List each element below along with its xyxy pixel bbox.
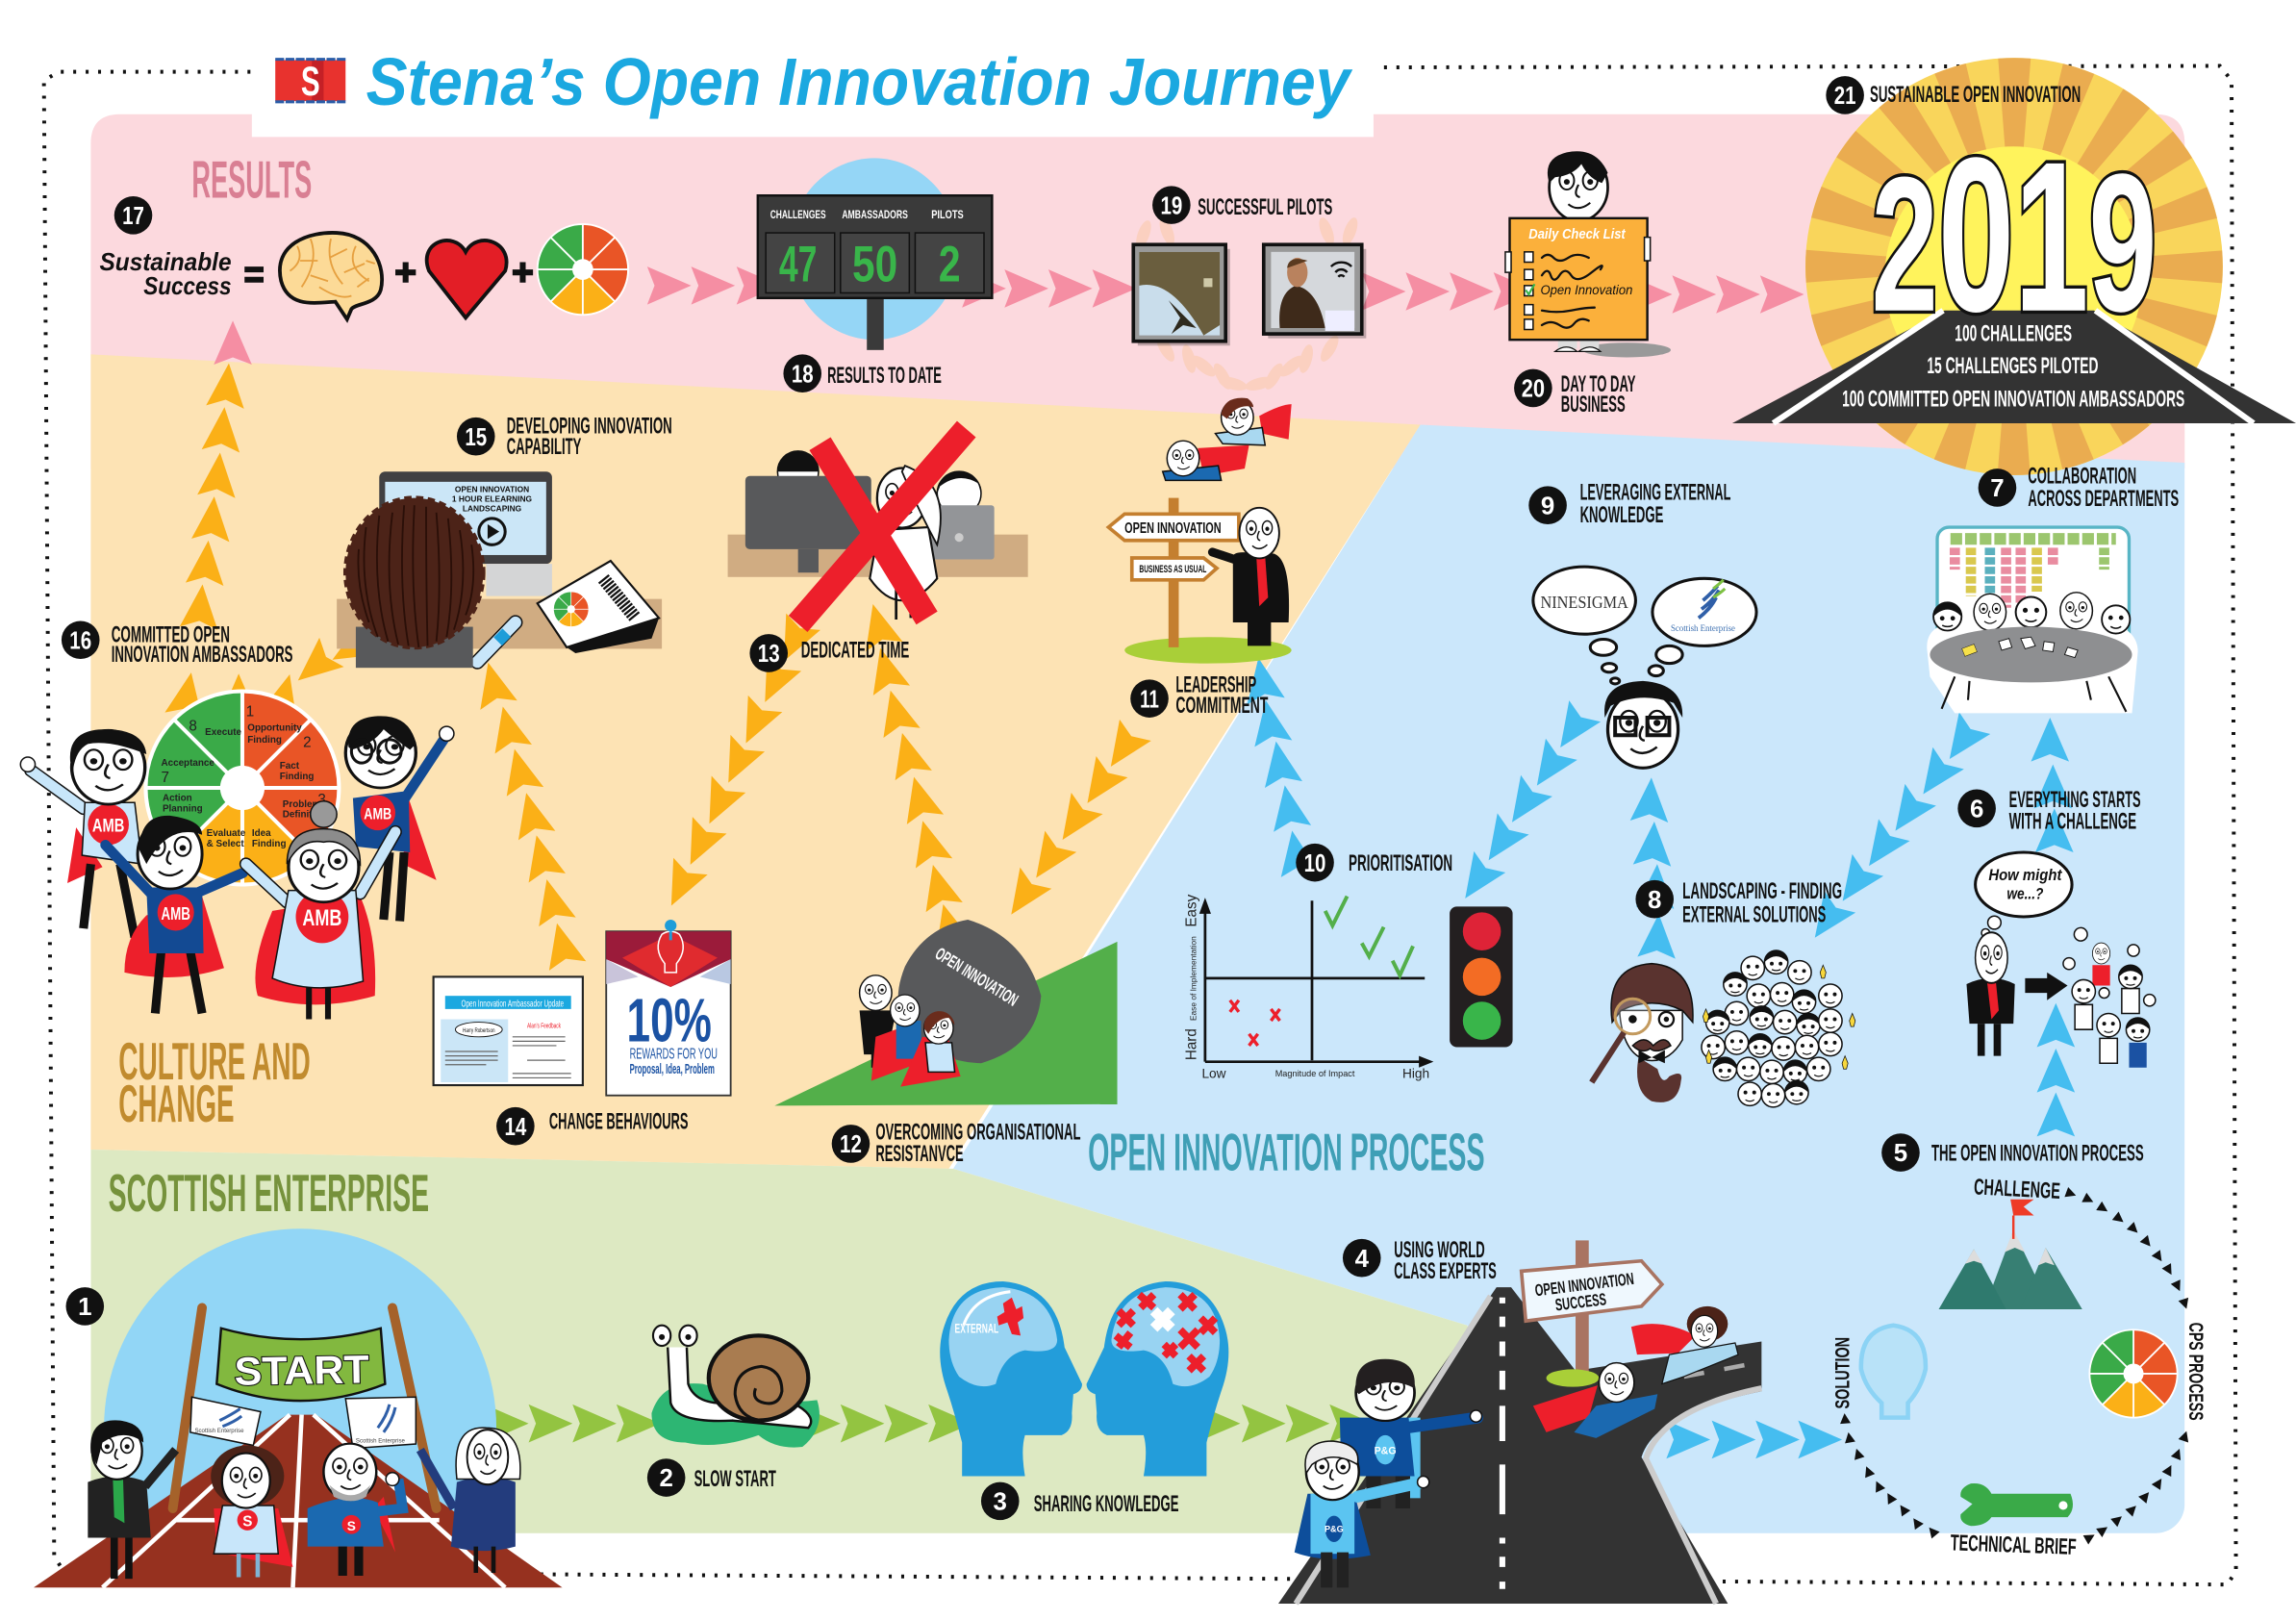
title background xyxy=(252,0,1374,137)
wheel labels: Action xyxy=(163,794,192,804)
sign: open innovation success: OPEN INNOVATION xyxy=(1534,1269,1635,1300)
wheel labels: Acceptance xyxy=(161,758,214,769)
person: suit and green tie xyxy=(88,1420,176,1579)
icon: stena flag xyxy=(275,59,345,105)
leadership commitment: signpost and man xyxy=(1108,498,1292,664)
step label 6: EVERYTHING STARTS xyxy=(2009,787,2141,812)
road under sun xyxy=(1732,311,2296,423)
heading: culture and change: CULTURE AND xyxy=(118,1031,311,1091)
heading: open innovation process: OPEN INNOVATION PROCESS xyxy=(1088,1122,1485,1181)
arrows: blue landscaping to knowledge xyxy=(1630,776,1678,959)
step badge 20 xyxy=(1514,369,1552,407)
screen text: LANDSCAPING xyxy=(463,503,521,513)
panel: open innovation process xyxy=(953,424,2184,1533)
panel: scottish enterprise xyxy=(90,1150,1552,1533)
heading: scottish enterprise: SCOTTISH ENTERPRISE xyxy=(109,1163,429,1223)
step label 8 xyxy=(1682,878,1842,926)
equation: sustainable success xyxy=(100,224,628,319)
sharing knowledge: left head: EXTERNAL xyxy=(955,1321,998,1335)
arrows: green scottish enterprise path xyxy=(485,1405,1374,1442)
screen text: 1 HOUR ELEARNING xyxy=(452,494,532,503)
woman with phone xyxy=(870,466,941,620)
wheel labels: Opportunity xyxy=(247,723,302,734)
ambassador: front left xyxy=(106,816,243,1013)
black arrow xyxy=(2025,973,2068,1000)
cycle label: cps process: CPS PROCESS xyxy=(2184,1323,2208,1421)
axis labels: High xyxy=(1402,1066,1429,1080)
equation: sustainable success: Success xyxy=(143,273,232,300)
collaboration across departments: whiteboard and team xyxy=(1927,527,2138,713)
arrows: orange up to results xyxy=(164,362,380,721)
results list xyxy=(1842,321,2184,411)
scoreboard: results to date xyxy=(758,158,992,350)
sticky notes xyxy=(1951,539,2116,608)
axis labels: Easy xyxy=(1184,894,1200,927)
step badge 10: 10 xyxy=(1304,850,1325,877)
road edge lines xyxy=(1774,311,2254,423)
cycle label: challenge: CHALLENGE xyxy=(1973,1174,2061,1203)
arrows: blue knowledge to prioritisation xyxy=(1450,700,1601,909)
step label 7 xyxy=(2028,463,2179,511)
icon: wheel in cycle xyxy=(2089,1329,2178,1418)
step badge 14: 14 xyxy=(504,1114,527,1141)
change behaviours: 10% poster: 10% xyxy=(627,985,712,1054)
heading: culture and change: CHANGE xyxy=(118,1074,235,1133)
red crosses xyxy=(1230,1000,1280,1046)
ambassador: right: AMB xyxy=(364,805,391,823)
checklist board: Daily Check List xyxy=(1528,227,1627,242)
running track xyxy=(34,1415,563,1587)
sharing knowledge: left head xyxy=(940,1281,1082,1477)
arrows: blue process to collaboration xyxy=(2031,718,2075,1136)
how might we: man and crowd xyxy=(1966,852,2156,1068)
step label 4: CLASS EXPERTS xyxy=(1394,1258,1497,1283)
developing innovation capability: person at monitor xyxy=(337,471,662,668)
step label 9: LEVERAGING EXTERNAL xyxy=(1580,480,1730,505)
sharing knowledge: right head xyxy=(1087,1281,1228,1477)
panel: culture and change xyxy=(90,354,1421,1169)
step badge 2 xyxy=(647,1458,685,1497)
step label 20 xyxy=(1561,371,1636,417)
step label 7: ACROSS DEPARTMENTS xyxy=(2028,486,2179,511)
sign: open innovation: OPEN INNOVATION xyxy=(1124,520,1222,537)
start banner: START xyxy=(234,1347,369,1394)
successful pilots: laurels and photos xyxy=(1133,215,1366,393)
step badge 8: 8 xyxy=(1648,887,1661,914)
arrows: blue prioritisation to leadership xyxy=(1240,654,1319,877)
icon: brain xyxy=(280,233,382,319)
step label 16: COMMITTED OPEN xyxy=(112,622,230,647)
plus xyxy=(395,262,533,283)
arrows: blue collaboration to landscaping xyxy=(1800,712,1990,949)
step badge 11: 11 xyxy=(1140,686,1159,713)
step badge 2: 2 xyxy=(659,1465,673,1492)
small team xyxy=(2063,927,2156,1068)
slow start: snail xyxy=(651,1326,820,1448)
step label 8: LANDSCAPING - FINDING xyxy=(1682,878,1842,903)
icon: mountains with flag xyxy=(1939,1200,2082,1309)
step badge 13: 13 xyxy=(758,641,780,668)
step badge 7: 7 xyxy=(1990,475,2005,502)
sign: open innovation success: SUCCESS xyxy=(1554,1289,1607,1315)
step badge 19 xyxy=(1152,186,1191,224)
step badge 16 xyxy=(62,620,100,659)
icon: heart xyxy=(427,240,507,317)
step badge 18 xyxy=(783,354,821,392)
logo: scottish enterprise xyxy=(1671,580,1735,633)
flying heroes xyxy=(1163,398,1292,480)
step label 9: KNOWLEDGE xyxy=(1580,502,1663,527)
step label 10: PRIORITISATION xyxy=(1349,850,1452,875)
step badge 9 xyxy=(1528,486,1567,524)
step badge 3 xyxy=(981,1482,1020,1520)
step label 11 xyxy=(1175,671,1269,718)
sign: open innovation xyxy=(1108,514,1239,541)
arrows: orange poster to capability xyxy=(469,658,586,971)
axis labels: Ease of Implementation xyxy=(1189,936,1198,1021)
scoreboard: results to date: 47 xyxy=(779,236,817,292)
step badge 11 xyxy=(1130,679,1169,718)
step badge 14 xyxy=(496,1107,535,1145)
traffic light xyxy=(1450,906,1513,1047)
green ticks xyxy=(1325,897,1413,975)
wheel labels: Idea xyxy=(252,828,271,839)
p&g man front xyxy=(1295,1441,1429,1587)
change behaviours: 10% poster: REWARDS FOR YOU xyxy=(630,1047,718,1063)
icon: stena flag: S xyxy=(301,59,320,105)
wheel labels: Execute xyxy=(205,727,242,738)
flags: Scottish Enterprise xyxy=(194,1428,244,1434)
change behaviours: newsletter: Harry Robertson xyxy=(463,1027,495,1034)
table xyxy=(1930,627,2132,682)
photo: man on phone xyxy=(1264,244,1366,339)
person: bald man with s badge xyxy=(308,1444,403,1576)
ambassador: left xyxy=(20,729,146,937)
scoreboard: results to date: CHALLENGES xyxy=(770,208,826,221)
results list: 100 CHALLENGES xyxy=(1955,321,2072,346)
step badge 17 xyxy=(114,196,152,235)
wheel labels: Finding xyxy=(252,839,286,849)
step label 15 xyxy=(507,414,672,459)
p&g man front: P&G xyxy=(1325,1524,1344,1533)
photo: propeller xyxy=(1133,244,1230,345)
change behaviours: newsletter: Open Innovation Ambassador Update xyxy=(462,1000,564,1010)
dedicated time: desk and cross xyxy=(728,429,1028,624)
step label 18: RESULTS TO DATE xyxy=(827,363,942,388)
landscaping: detective xyxy=(1592,964,1693,1102)
step badge 8 xyxy=(1635,880,1674,918)
step label 21: SUSTAINABLE OPEN INNOVATION xyxy=(1870,82,2081,107)
wheel labels: Problem xyxy=(283,799,321,810)
sign: business as usual xyxy=(1132,558,1217,580)
step badge 10 xyxy=(1296,844,1334,881)
step label 6 xyxy=(2009,787,2141,834)
wheel labels: Planning xyxy=(163,803,203,814)
flags xyxy=(190,1397,416,1449)
step badge 15 xyxy=(457,418,495,455)
wheel labels: 3 xyxy=(317,792,326,808)
logo: ninesigma: NINESIGMA xyxy=(1540,593,1629,612)
step badge 18: 18 xyxy=(792,361,814,388)
scottish enterprise start scene xyxy=(34,1228,563,1620)
step badge 9: 9 xyxy=(1541,493,1554,519)
landscaping: crowd of faces xyxy=(1702,950,1855,1107)
step label 15: CAPABILITY xyxy=(507,434,582,459)
axis labels: Magnitude of Impact xyxy=(1275,1069,1355,1078)
step label 2: SLOW START xyxy=(694,1466,776,1491)
arrows: orange leadership to boulder xyxy=(996,720,1151,925)
wheel labels: Fact xyxy=(280,761,300,772)
change behaviours: 10% poster xyxy=(606,920,731,1096)
book xyxy=(538,561,659,653)
p&g man pointing: P&G xyxy=(1375,1446,1397,1457)
step badge 5: 5 xyxy=(1894,1140,1907,1167)
step badge 19: 19 xyxy=(1160,192,1182,219)
step badge 13 xyxy=(749,634,788,672)
cps cycle: dotted arc arrows xyxy=(1839,1187,2191,1544)
leveraging external knowledge: thinking head xyxy=(1533,567,1756,768)
step label 4 xyxy=(1394,1237,1497,1283)
step badge 21: 21 xyxy=(1834,83,1856,110)
change behaviours: newsletter xyxy=(434,976,583,1085)
thought bubble: How might xyxy=(1988,866,2063,884)
start banner xyxy=(173,1307,437,1508)
step badge 4: 4 xyxy=(1355,1246,1370,1273)
wheel labels: Finding xyxy=(280,772,314,782)
people pushing xyxy=(860,975,961,1087)
step badge 21 xyxy=(1826,76,1864,114)
logo: scottish enterprise: Scottish Enterprise xyxy=(1671,623,1735,633)
step badge 1: 1 xyxy=(78,1294,91,1321)
step label 11: COMMITMENT xyxy=(1175,693,1269,718)
prioritisation matrix xyxy=(1184,894,1433,1080)
wheel labels: Definition xyxy=(283,809,326,820)
results list: 15 CHALLENGES PILOTED xyxy=(1927,353,2098,378)
arrows: blue road to solution xyxy=(1666,1421,1842,1458)
person: woman in navy coat xyxy=(420,1428,520,1573)
checklist board: Open Innovation xyxy=(1540,283,1632,297)
step label 19: SUCCESSFUL PILOTS xyxy=(1198,194,1332,219)
step label 13: DEDICATED TIME xyxy=(801,638,909,663)
icon: wrench xyxy=(1960,1483,2073,1526)
wheel labels: 8 xyxy=(189,719,197,735)
step label 11: LEADERSHIP xyxy=(1175,671,1256,696)
step label 20: BUSINESS xyxy=(1561,392,1626,417)
red cross xyxy=(798,429,967,624)
change behaviours: 10% poster: Proposal, Idea, Problem xyxy=(630,1062,715,1077)
scoreboard: results to date: 50 xyxy=(852,236,897,292)
step badge 3: 3 xyxy=(994,1489,1007,1516)
scoreboard: results to date: AMBASSADORS xyxy=(842,208,908,221)
ambassador: right xyxy=(345,716,454,922)
team xyxy=(1933,593,2130,634)
sign: business as usual: BUSINESS AS USUAL xyxy=(1139,564,1207,575)
boulder label: OPEN INNOVATION xyxy=(932,943,1022,1010)
panel: results xyxy=(90,114,2184,468)
step badge 4 xyxy=(1343,1239,1381,1277)
checklist board xyxy=(1510,218,1648,340)
cycle label: solution: SOLUTION xyxy=(1831,1337,1854,1408)
ambassador: front right xyxy=(246,801,395,1020)
step label 8: EXTERNAL SOLUTIONS xyxy=(1682,901,1826,926)
using world class experts: road xyxy=(1278,1240,1761,1604)
step badge 6: 6 xyxy=(1970,796,1983,823)
step 21: sustainable open innovation sun xyxy=(1732,58,2296,475)
thought bubble: we...? xyxy=(2006,885,2043,903)
flags: Scottish Enterprise xyxy=(356,1437,406,1444)
axis labels xyxy=(1184,894,1429,1080)
overcoming resistance: hill and boulder xyxy=(774,920,1118,1105)
step badge 16: 16 xyxy=(69,627,91,654)
ambassador: left: AMB xyxy=(92,816,124,837)
step badge 12: 12 xyxy=(840,1131,862,1158)
wheel labels: Evaluate xyxy=(207,828,246,839)
cps wheel with ambassadors xyxy=(20,692,454,1020)
screen text: OPEN INNOVATION xyxy=(455,485,529,494)
step label 12: RESISTANVCE xyxy=(875,1141,964,1166)
arrows: pink results path xyxy=(214,266,1804,365)
text: RESULTS xyxy=(191,150,312,210)
sign: open innovation success xyxy=(1522,1240,1662,1387)
step badge 12 xyxy=(832,1125,870,1163)
wheel labels: & Select xyxy=(207,839,244,849)
wheel labels: Finding xyxy=(247,735,282,746)
step label 12 xyxy=(875,1119,1080,1166)
ambassador: front right: AMB xyxy=(302,905,341,931)
thought bubble xyxy=(1976,852,2072,937)
step label 14: CHANGE BEHAVIOURS xyxy=(549,1109,688,1134)
day to day business: person with checklist xyxy=(1505,151,1671,357)
step badge 17: 17 xyxy=(122,203,144,230)
icon: cps wheel xyxy=(538,224,628,315)
screen text xyxy=(452,485,532,544)
ambassador: front left: AMB xyxy=(161,903,190,924)
step label 16: INNOVATION AMBASSADORS xyxy=(112,642,292,667)
flying man xyxy=(1533,1363,1657,1438)
step label 12: OVERCOMING ORGANISATIONAL xyxy=(875,1119,1080,1144)
step badge 5 xyxy=(1881,1133,1920,1172)
person: bald man with s badge: S xyxy=(347,1519,356,1533)
equation: sustainable success: Sustainable xyxy=(100,249,232,276)
wheel labels: 7 xyxy=(161,770,169,786)
flying man xyxy=(1198,445,1249,476)
cycle label: technical brief: TECHNICAL BRIEF xyxy=(1950,1530,2077,1559)
axis labels: Hard xyxy=(1184,1028,1200,1060)
title: Stena’s Open Innovation Journey xyxy=(366,44,1353,119)
step label 9 xyxy=(1580,480,1730,527)
step label 7: COLLABORATION xyxy=(2028,463,2136,488)
flying lady xyxy=(1631,1306,1738,1384)
step badge 6 xyxy=(1957,790,1996,827)
step label 15: DEVELOPING INNOVATION xyxy=(507,414,672,439)
person: woman with s badge: S xyxy=(242,1513,252,1530)
step label 16 xyxy=(112,622,292,667)
change behaviours: newsletter: Alan’s Feedback xyxy=(527,1022,561,1030)
step label 6: WITH A CHALLENGE xyxy=(2009,809,2136,834)
wheel labels: 1 xyxy=(246,703,254,720)
wheel labels: 2 xyxy=(303,734,312,750)
step label 4: USING WORLD xyxy=(1394,1237,1485,1262)
step label 3: SHARING KNOWLEDGE xyxy=(1034,1491,1178,1516)
heading: culture and change xyxy=(118,1031,311,1133)
icon: lightbulb xyxy=(1861,1326,1926,1418)
arrows: orange dedicated time to poster xyxy=(654,614,820,914)
p&g man pointing xyxy=(1340,1359,1482,1508)
axis labels: Low xyxy=(1201,1066,1226,1080)
step label 20: DAY TO DAY xyxy=(1561,371,1636,396)
arrows: orange boulder to dedicated time xyxy=(854,599,972,951)
step badge 20: 20 xyxy=(1522,376,1545,403)
step badge 15: 15 xyxy=(465,424,487,451)
year 2019: 2019 xyxy=(1872,113,2157,358)
wheel labels xyxy=(161,703,326,849)
scoreboard: results to date: 2 xyxy=(939,236,961,292)
person: woman with s badge xyxy=(211,1446,292,1578)
step badge 1 xyxy=(66,1287,104,1326)
scoreboard: results to date: PILOTS xyxy=(931,208,964,221)
step badge 7 xyxy=(1979,468,2016,507)
